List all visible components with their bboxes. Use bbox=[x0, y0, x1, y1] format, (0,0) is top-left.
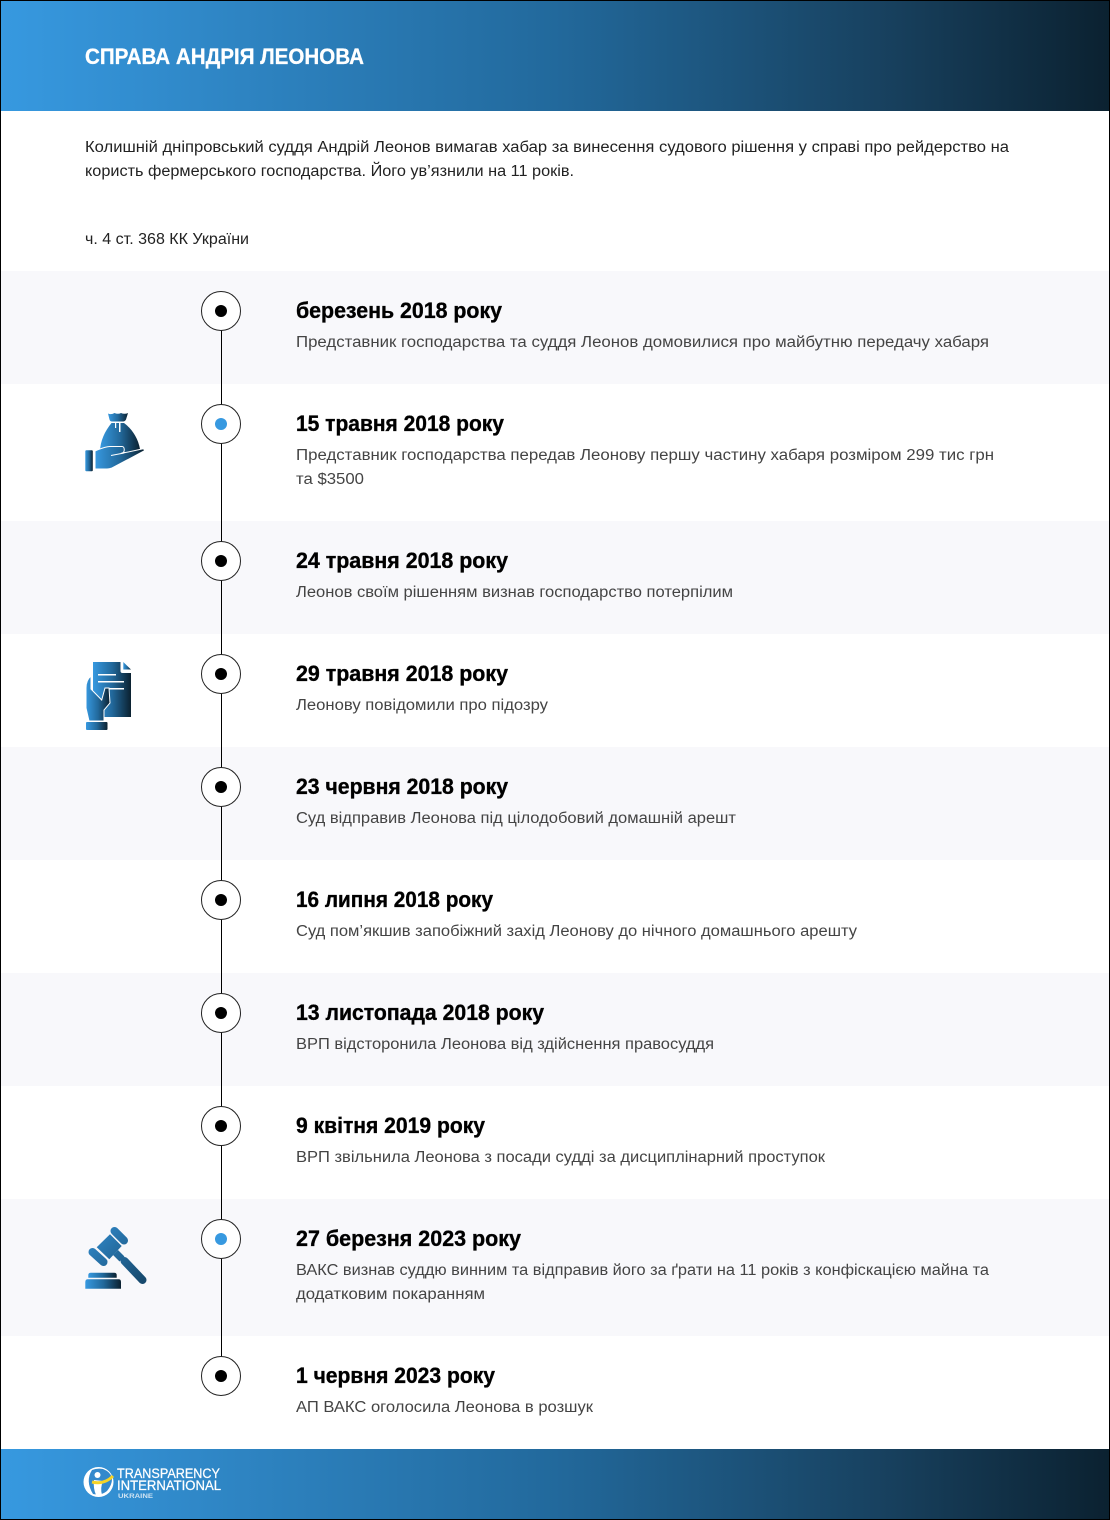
event: 27 березня 2023 bbox=[202, 1220, 989, 1303]
header banner bbox=[0, 0, 1110, 111]
event: 15 травня 2018: та $3500 bbox=[296, 471, 364, 488]
timeline axis bbox=[221, 311, 222, 1376]
event: 15 травня 2018: Представник господарства передав Леонову першу частину хабаря розміром 299 тис грн bbox=[296, 447, 994, 464]
icon: money bag in hand bbox=[85, 413, 144, 471]
event: 23 червня 2018: Суд відправив Леонова під цілодобовий домашній арешт bbox=[296, 810, 736, 827]
event: 29 травня 2018: 29 травня 2018 року bbox=[296, 661, 509, 686]
logo: Transparency International Ukraine bbox=[84, 1466, 221, 1500]
event: березень 2018 bbox=[202, 292, 989, 351]
event: 1 червня 2023: 1 червня 2023 року bbox=[296, 1363, 496, 1388]
title: СПРАВА АНДРІЯ ЛЕОНОВА bbox=[85, 44, 364, 69]
logo: Transparency International Ukraine: TRANSPARENCY bbox=[117, 1466, 220, 1481]
icon: hand holding document bbox=[86, 662, 131, 730]
intro text: користь фермерського господарства. Його ув’язнили на 11 років. bbox=[85, 162, 574, 180]
event: 23 червня 2018: 23 червня 2018 року bbox=[296, 774, 509, 799]
intro text bbox=[85, 139, 1009, 180]
event: 9 квітня 2019: ВРП звільнила Леонова з посади судді за дисциплінарний проступок bbox=[296, 1149, 825, 1166]
event: 27 березня 2023: ВАКС визнав суддю винним та відправив його за ґрати на 11 років з конфіскацією майна та bbox=[296, 1262, 989, 1279]
legal article reference: ч. 4 ст. 368 КК України bbox=[85, 231, 249, 248]
logo: Transparency International Ukraine: UKRAINE bbox=[118, 1493, 154, 1500]
intro text: Колишній дніпровський суддя Андрій Леонов вимагав хабар за винесення судового рішення у справі про рейдерство на bbox=[85, 139, 1009, 156]
event: березень 2018: березень 2018 року bbox=[296, 298, 503, 323]
logo: Transparency International Ukraine: INTERNATIONAL bbox=[117, 1478, 221, 1493]
event: 16 липня 2018: Суд пом’якшив запобіжний захід Леонову до нічного домашнього арешту bbox=[296, 923, 857, 940]
event: 1 червня 2023: АП ВАКС оголосила Леонова в розшук bbox=[296, 1399, 593, 1416]
event: 9 квітня 2019 bbox=[202, 1106, 825, 1166]
event: 24 травня 2018: Леонов своїм рішенням визнав господарство потерпілим bbox=[296, 584, 733, 601]
event: 29 травня 2018 bbox=[202, 654, 548, 714]
event: 27 березня 2023: 27 березня 2023 року bbox=[296, 1226, 522, 1251]
event: 16 липня 2018: 16 липня 2018 року bbox=[296, 887, 494, 912]
event: 15 травня 2018 bbox=[202, 404, 994, 488]
event: 9 квітня 2019: 9 квітня 2019 року bbox=[296, 1113, 486, 1138]
event: 1 червня 2023 bbox=[202, 1356, 593, 1416]
event: 23 червня 2018 bbox=[202, 768, 736, 827]
event: 13 листопада 2018 bbox=[202, 994, 714, 1053]
event: 24 травня 2018: 24 травня 2018 року bbox=[296, 548, 509, 573]
event: 13 листопада 2018: ВРП відсторонила Леонова від здійснення правосуддя bbox=[296, 1036, 714, 1053]
footer banner bbox=[0, 1449, 1110, 1520]
event: 24 травня 2018 bbox=[202, 542, 733, 601]
icon: judge gavel bbox=[85, 1231, 142, 1289]
event: 27 березня 2023: додатковим покаранням bbox=[296, 1286, 485, 1303]
event: 15 травня 2018: 15 травня 2018 року bbox=[296, 411, 505, 436]
event: 29 травня 2018: Леонову повідомили про підозру bbox=[296, 697, 548, 714]
event: 16 липня 2018 bbox=[202, 880, 857, 940]
event: березень 2018: Представник господарства та суддя Леонов домовилися про майбутню передачу хабаря bbox=[296, 334, 989, 351]
event: 13 листопада 2018: 13 листопада 2018 року bbox=[296, 1000, 545, 1025]
